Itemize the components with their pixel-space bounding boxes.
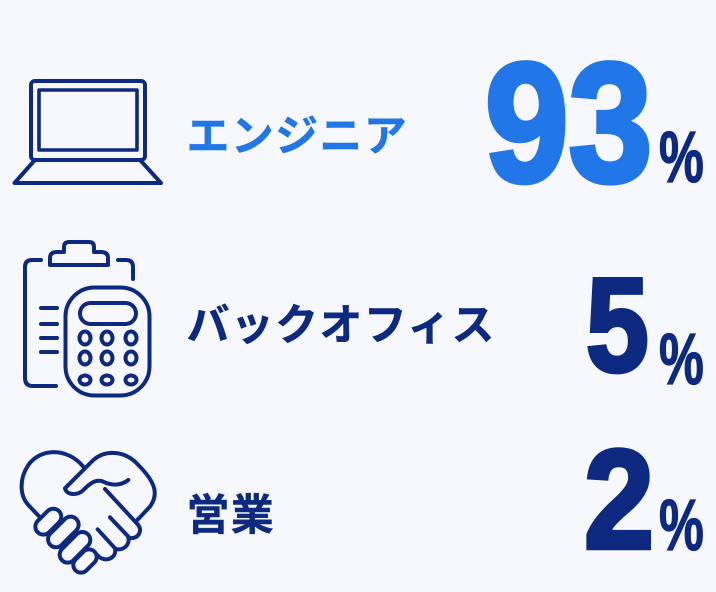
number: 2: 2 [584,421,654,579]
icon: laptop [14,81,161,183]
label: engineer: エンジニア [186,113,408,161]
percent sign: % [659,319,704,400]
label: sales: 営業 [186,492,275,540]
percent sign: % [659,485,704,566]
label: back office: バックオフィス [186,302,496,350]
icon: clipboard and calculator [25,242,150,396]
percent sign: % [659,117,704,198]
row: back office [25,242,704,400]
row: sales [22,421,704,579]
number: 5: 5 [586,251,649,400]
row: engineer [14,28,704,217]
icon: handshake heart [22,452,155,576]
number: 93: 93 [485,28,652,217]
